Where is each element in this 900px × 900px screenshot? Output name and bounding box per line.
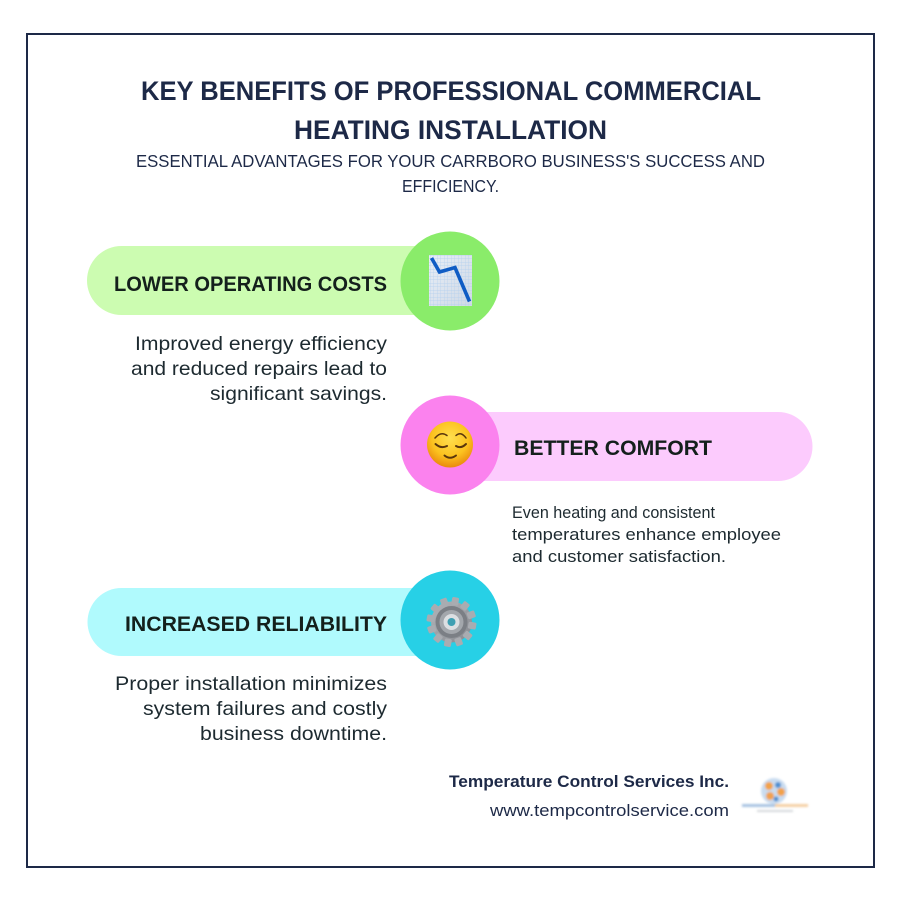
text: better comfort description xyxy=(512,503,781,566)
heading pill: lower operating costs: LOWER OPERATING COSTS xyxy=(114,273,387,296)
heading pill: increased reliability: INCREASED RELIABILITY xyxy=(125,613,387,636)
footer: company name: Temperature Control Services Inc. xyxy=(449,772,729,791)
panel: lower operating costs xyxy=(87,232,500,405)
text: increased reliability description xyxy=(115,673,387,745)
title: HEATING INSTALLATION xyxy=(294,115,607,145)
text: better comfort description: and customer satisfaction. xyxy=(512,547,726,566)
text: lower operating costs description: and reduced repairs lead to xyxy=(131,358,387,380)
footer: website: www.tempcontrolservice.com xyxy=(489,801,729,820)
title xyxy=(141,76,761,145)
subtitle: ESSENTIAL ADVANTAGES FOR YOUR CARRBORO BUSINESS'S SUCCESS AND xyxy=(136,151,765,171)
subtitle: EFFICIENCY. xyxy=(402,176,499,196)
title: KEY BENEFITS OF PROFESSIONAL COMMERCIAL xyxy=(141,76,761,106)
icon: relieved face xyxy=(400,396,500,494)
text: increased reliability description: system failures and costly xyxy=(143,698,387,720)
text: increased reliability description: business downtime. xyxy=(200,723,387,745)
panel: increased reliability xyxy=(88,570,500,745)
text: better comfort description: Even heating and consistent xyxy=(512,503,715,522)
subtitle xyxy=(136,151,765,196)
heading pill: better comfort: BETTER COMFORT xyxy=(514,437,712,460)
text: better comfort description: temperatures enhance employee xyxy=(512,525,781,544)
text: increased reliability description: Proper installation minimizes xyxy=(115,673,387,695)
heading pill: increased reliability xyxy=(88,588,450,656)
heading pill: better comfort xyxy=(450,412,813,481)
icon: chart decreasing xyxy=(400,232,500,330)
text: lower operating costs description xyxy=(131,333,387,405)
text: lower operating costs description: Improved energy efficiency xyxy=(135,333,387,355)
text: lower operating costs description: significant savings. xyxy=(210,383,387,405)
icon: company logo xyxy=(742,778,808,812)
panel: better comfort xyxy=(400,396,813,566)
heading pill: lower operating costs xyxy=(87,246,450,315)
icon: gear xyxy=(400,570,500,670)
